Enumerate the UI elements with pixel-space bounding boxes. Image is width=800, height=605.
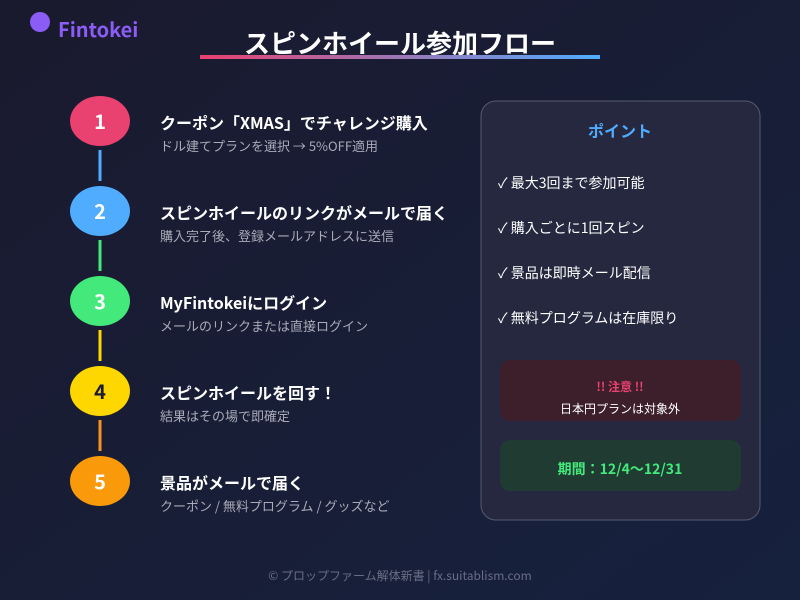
step 5: 景品がメールで届く [160, 470, 304, 494]
panel: points: ✓ 無料プログラムは在庫限り [498, 308, 678, 328]
panel: points: ポイント [588, 118, 652, 142]
step 2 [70, 186, 448, 245]
step 5: 5 [94, 466, 106, 495]
step 5 [70, 456, 389, 515]
panel: points [481, 101, 760, 520]
callout: warning: !! 注意 !! [596, 378, 644, 395]
step 4: 4 [94, 376, 106, 405]
footer: © プロップファーム解体新書 | fx.suitablism.com [268, 567, 532, 584]
step 1: クーポン「XMAS」でチャレンジ購入 [160, 110, 428, 134]
step 2: スピンホイールのリンクがメールで届く [160, 200, 448, 224]
title: スピンホイール参加フロー [244, 24, 556, 61]
logo: Fintokei [58, 14, 138, 43]
step 3: 3 [94, 286, 106, 315]
step 1 [70, 96, 428, 155]
step 5: クーポン / 無料プログラム / グッズなど [160, 496, 389, 515]
panel: points: ✓ 景品は即時メール配信 [498, 263, 651, 283]
logo [30, 12, 138, 43]
callout: period [500, 440, 741, 491]
step 1: 1 [94, 106, 106, 135]
step 3 [70, 276, 368, 335]
panel: points: ✓ 購入ごとに1回スピン [498, 218, 644, 238]
step 4: 結果はその場で即確定 [160, 406, 290, 425]
step 3: MyFintokeiにログイン [160, 290, 327, 314]
step 2: 2 [94, 196, 106, 225]
callout: warning [500, 360, 741, 421]
step 1: ドル建てプランを選択 → 5%OFF適用 [160, 136, 378, 155]
connectors [98, 150, 102, 451]
step 3: メールのリンクまたは直接ログイン [160, 316, 368, 335]
panel: points: ✓ 最大3回まで参加可能 [498, 173, 644, 193]
callout: warning: 日本円プランは対象外 [560, 400, 680, 417]
step 4: スピンホイールを回す！ [160, 380, 336, 404]
step 4 [70, 366, 336, 425]
callout: period: 期間：12/4〜12/31 [558, 459, 682, 479]
step 2: 購入完了後、登録メールアドレスに送信 [160, 226, 394, 245]
